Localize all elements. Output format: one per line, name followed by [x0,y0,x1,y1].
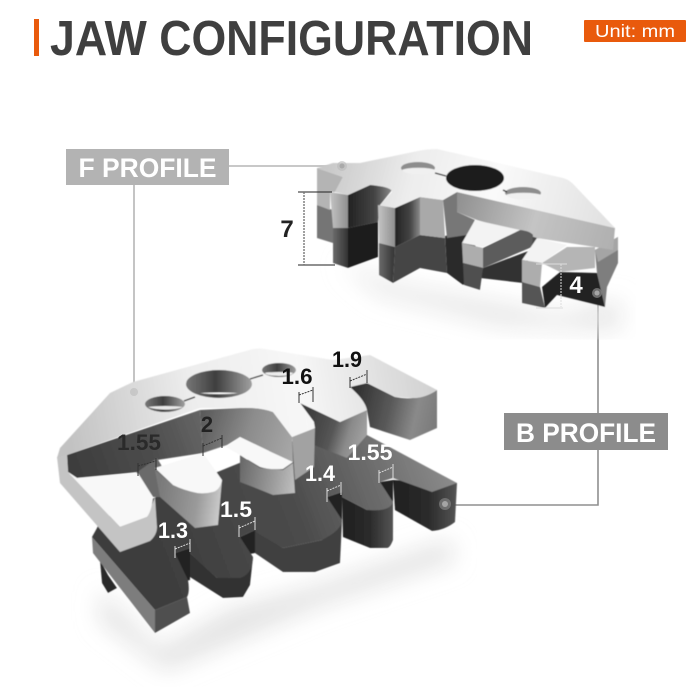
dimension: 4: 4 [569,272,583,299]
F finger B band [155,470,222,528]
dimension: 7 [280,192,335,265]
dimension: 1.55 upper: 1.55 [117,430,161,455]
dark backing between teeth and fingers [445,230,483,285]
tooth 3 [420,197,445,238]
dimension: 1.55 upper [117,430,161,476]
B tab wall [393,480,457,531]
dimension: 1.5 [220,497,255,537]
dimension: 2: 2 [201,412,213,437]
title accent bar [34,19,39,56]
finger 1 [483,230,533,268]
slots and centre hole [145,396,185,412]
F finger B floor [155,453,222,493]
leader lines [134,166,598,505]
B finger 4 wall [342,497,393,548]
unit badge: Unit: mm [595,21,675,41]
tooth 2 [378,205,395,247]
jaw: upper right F and B pair [317,149,620,330]
F top face [57,348,437,458]
dimension: 1.5: 1.5 [220,497,252,522]
title [34,12,533,66]
title text: JAW CONFIGURATION [50,12,533,66]
ground shadow [340,262,620,330]
dimension: 2 [201,412,222,456]
label: F profile: F PROFILE [78,153,216,183]
F finger C floor [226,437,293,469]
label: B profile: B PROFILE [516,418,656,448]
gap 1 [348,185,392,228]
B finger 3 wall [255,520,342,572]
dimension: 1.3 [158,518,190,558]
dimension: 1.6: 1.6 [282,364,312,389]
end cap [595,237,618,307]
F strip between [292,428,315,480]
lower dark wall [542,272,605,308]
dimension: 7: 7 [280,216,294,243]
dimension: 1.3: 1.3 [158,518,188,543]
F recess wall: centre [200,408,293,462]
outer left strip [317,205,333,243]
gap 2 [395,197,420,247]
dimension: 4 [536,264,583,308]
dimension: 1.9 [332,347,367,388]
F finger C band [240,455,295,495]
dimension: 1.55 lower: 1.55 [348,440,392,465]
dimension: 1.9: 1.9 [332,347,362,372]
ground shadow [100,540,455,670]
B finger 1 wall [155,597,190,633]
dimension: 1.4 [305,461,341,502]
slots and centre hole [401,162,435,174]
dimension: 1.6 [282,364,313,403]
finger 2 [542,247,595,272]
dimension: 1.55 lower [348,440,393,483]
F recess wall: left [67,410,203,478]
tooth 1 [330,192,348,228]
F finger D wall [300,403,367,458]
B finger 2 wall [190,553,253,598]
F finger E wall [350,383,437,440]
top face [317,149,615,228]
long back wall [457,192,615,250]
dimension: 1.4: 1.4 [305,461,336,486]
B left side and foot [100,560,117,593]
F front strip [57,455,157,552]
jaw: lower left F and B pair [57,348,457,670]
unit badge [584,20,686,42]
B top face [92,430,457,610]
inner wall [443,192,475,238]
F finger A inner wall [136,458,173,497]
F floor surface [68,472,153,527]
leader dots [130,161,602,510]
gap ribs [175,480,393,582]
